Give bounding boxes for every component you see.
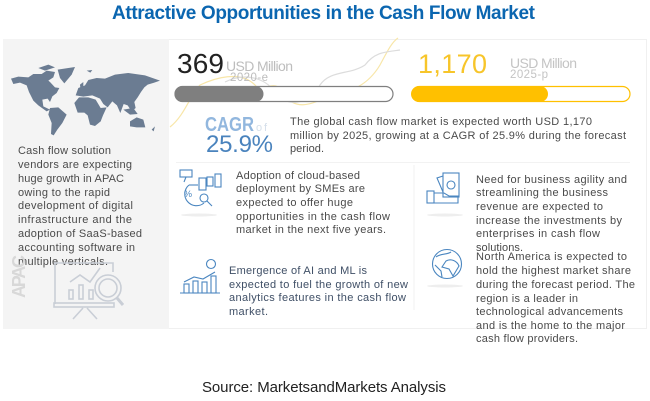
text: APAC growth note: Cash flow solution xyxy=(18,145,111,157)
text: business agility: streamlining the business xyxy=(476,187,608,199)
stat: 2020 value xyxy=(177,48,293,84)
text: APAC growth note: development of digital xyxy=(18,200,133,212)
text: North America: and is the home to the major xyxy=(476,320,625,332)
text: APAC growth note: infrastructure and the xyxy=(18,214,132,226)
title: Attractive Opportunities in the Cash Flow Market xyxy=(112,3,536,24)
stat: 2020 value: 2020-e xyxy=(230,72,268,84)
decorative swirls xyxy=(170,38,400,127)
icon: world map xyxy=(11,65,160,135)
stat: CAGR: 25.9% xyxy=(206,131,273,158)
text: business agility: solutions. xyxy=(476,242,523,254)
text: business agility: enterprises in cash flow xyxy=(476,228,600,240)
text: market summary: The global cash flow market is expected worth USD 1,170 xyxy=(290,116,592,128)
text: North America: during the forecast period. The xyxy=(476,279,635,291)
text: APAC growth note: accounting software in xyxy=(18,242,135,254)
source line: Source: MarketsandMarkets Analysis xyxy=(202,379,446,396)
text: cloud deployment: expected to offer huge xyxy=(236,197,353,209)
text: North America: technological advancements xyxy=(476,306,624,318)
text: business agility: increase the investments by xyxy=(476,215,622,227)
stat: 2020 value: 369 xyxy=(177,48,224,79)
text: APAC growth note: vendors are expecting xyxy=(18,159,132,171)
text: business agility: Need for business agility and xyxy=(476,174,627,186)
icon: percent and charts: % xyxy=(184,189,192,199)
icon: growth chart xyxy=(180,260,220,293)
stat: CAGR: of xyxy=(256,122,268,134)
panel: main frame xyxy=(4,40,646,328)
bar: 2020 progress xyxy=(174,86,393,102)
text: AI and ML: analytics features in the cash flow xyxy=(229,292,406,304)
panel: left sidebar xyxy=(3,39,169,329)
stat: 2025 value xyxy=(418,49,577,81)
text: cloud deployment: market in the next five years. xyxy=(236,224,386,236)
stat: 2025 value: 2025-p xyxy=(510,69,548,81)
text: APAC growth note: huge growth in APAC xyxy=(18,173,124,185)
text: North America: hold the highest market share xyxy=(476,265,631,277)
stat: 2025 value: USD Million xyxy=(510,55,577,71)
text: cloud deployment xyxy=(236,170,390,236)
text: AI and ML xyxy=(229,265,408,318)
text: APAC growth note xyxy=(18,145,142,268)
text: North America: region is a leader in xyxy=(476,293,578,305)
stat: 2020 value: USD Million xyxy=(226,58,293,74)
icon: hand with money xyxy=(427,173,463,216)
text: AI and ML: expected to fuel the growth of new xyxy=(229,279,408,291)
text: market summary xyxy=(290,116,626,155)
icon: percent and charts xyxy=(180,170,221,216)
icon: presentation board xyxy=(54,263,123,319)
text: APAC growth note: adoption of SaaS-based xyxy=(18,228,142,240)
stat: CAGR xyxy=(205,114,273,158)
text: North America: cash flow providers. xyxy=(476,333,578,345)
bar: 2025 progress xyxy=(411,86,630,102)
text: North America xyxy=(476,251,635,345)
icon: globe xyxy=(427,250,463,288)
text: AI and ML: market. xyxy=(229,306,268,318)
text: AI and ML: Emergence of AI and ML is xyxy=(229,265,368,277)
text: cloud deployment: Adoption of cloud-based xyxy=(236,170,360,182)
text: business agility xyxy=(476,174,627,254)
text: APAC growth note: owing to the rapid xyxy=(18,187,110,199)
text: business agility: revenue are expected to xyxy=(476,201,603,213)
text: cloud deployment: deployment by SMEs are xyxy=(236,183,365,195)
stat: CAGR: CAGR xyxy=(205,114,254,136)
text: North America: North America is expected to xyxy=(476,251,627,263)
label: APAC: APAC xyxy=(9,255,29,298)
text: cloud deployment: opportunities in the cash flow xyxy=(236,211,390,223)
text: market summary: million by 2025, growing at a CAGR of 25.9% during the forecast xyxy=(290,130,626,142)
stat: 2025 value: 1,170 xyxy=(418,49,487,79)
text: APAC growth note: multiple verticals. xyxy=(18,256,108,268)
text: market summary: period. xyxy=(290,143,324,155)
